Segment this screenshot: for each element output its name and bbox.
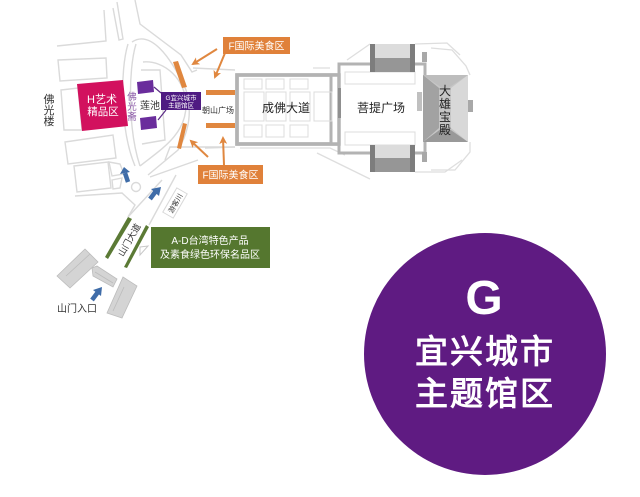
zone H: art boutique: 精品区 [87,105,119,118]
label: F food zone top [223,37,290,54]
label: 成佛大道: 成佛大道 [262,101,310,115]
zone H: art boutique [77,80,128,131]
icon: lower side hall [370,145,415,172]
label: 大雄宝殿: 宝 [439,110,451,124]
callout: G zone circle [364,233,606,475]
label: F food zone bottom [198,165,263,184]
label: A-D zone: 及素食绿色环保名品区 [160,248,260,261]
green stalls [105,217,149,268]
zone G pointers [154,87,166,120]
zone G: pavilion blocks [137,80,157,130]
icon: side stairs [422,52,473,162]
label: A-D zone: A-D台湾特色产品 [171,234,249,247]
arrows: food zone pointers [191,49,225,165]
label: 大雄宝殿: 大 [439,84,451,98]
label: 佛光斋 [127,91,137,123]
label: 佛光楼: 楼 [44,114,54,128]
icon: small triangle marker [140,246,148,255]
label: 佛光楼: 佛 [44,93,54,106]
label: G zone: 主题馆区 [168,100,194,110]
map: main temple complex [237,43,473,179]
map: entrance gate buildings [57,249,137,318]
label: 菩提广场: 菩提广场 [357,100,405,115]
orange stalls [173,61,235,149]
label: 大雄宝殿: 殿 [439,123,451,137]
label: 山门入口: 山门入口 [57,302,97,315]
label: 大雄宝殿 [439,84,451,137]
label: G zone [161,92,201,110]
icon: upper side hall [370,44,415,72]
label: 大雄宝殿: 雄 [439,96,451,111]
callout: G zone circle: G [465,272,503,325]
label: 山门大道: 山门大道 [115,221,143,258]
icon: main hall roof [423,75,468,142]
label: F food zone bottom: F国际美食区 [202,168,259,182]
label: 佛光斋: 光 [127,101,137,113]
zone H: art boutique: H艺术 [87,93,117,106]
label: 佛光楼: 光 [44,103,54,117]
map: site roads and plots [57,0,235,225]
label: G zone: G宜兴城市 [165,93,197,102]
label: 游客川 sign [163,188,187,218]
label: 佛光斋: 佛 [127,91,137,103]
blue direction arrows [92,167,161,300]
label: 莲池: 莲池 [140,99,160,112]
label: 游客川 sign: 游客川 [166,192,185,215]
label: A-D zone [151,227,270,268]
callout: G zone circle: 宜兴城市 [415,333,555,370]
label: 佛光斋: 斋 [127,111,137,123]
callout: G zone circle: 主题馆区 [415,375,555,412]
label: 佛光楼 [44,93,54,128]
label: F food zone top: F国际美食区 [228,40,285,52]
label: 朝山广场: 朝山广场 [202,105,234,115]
